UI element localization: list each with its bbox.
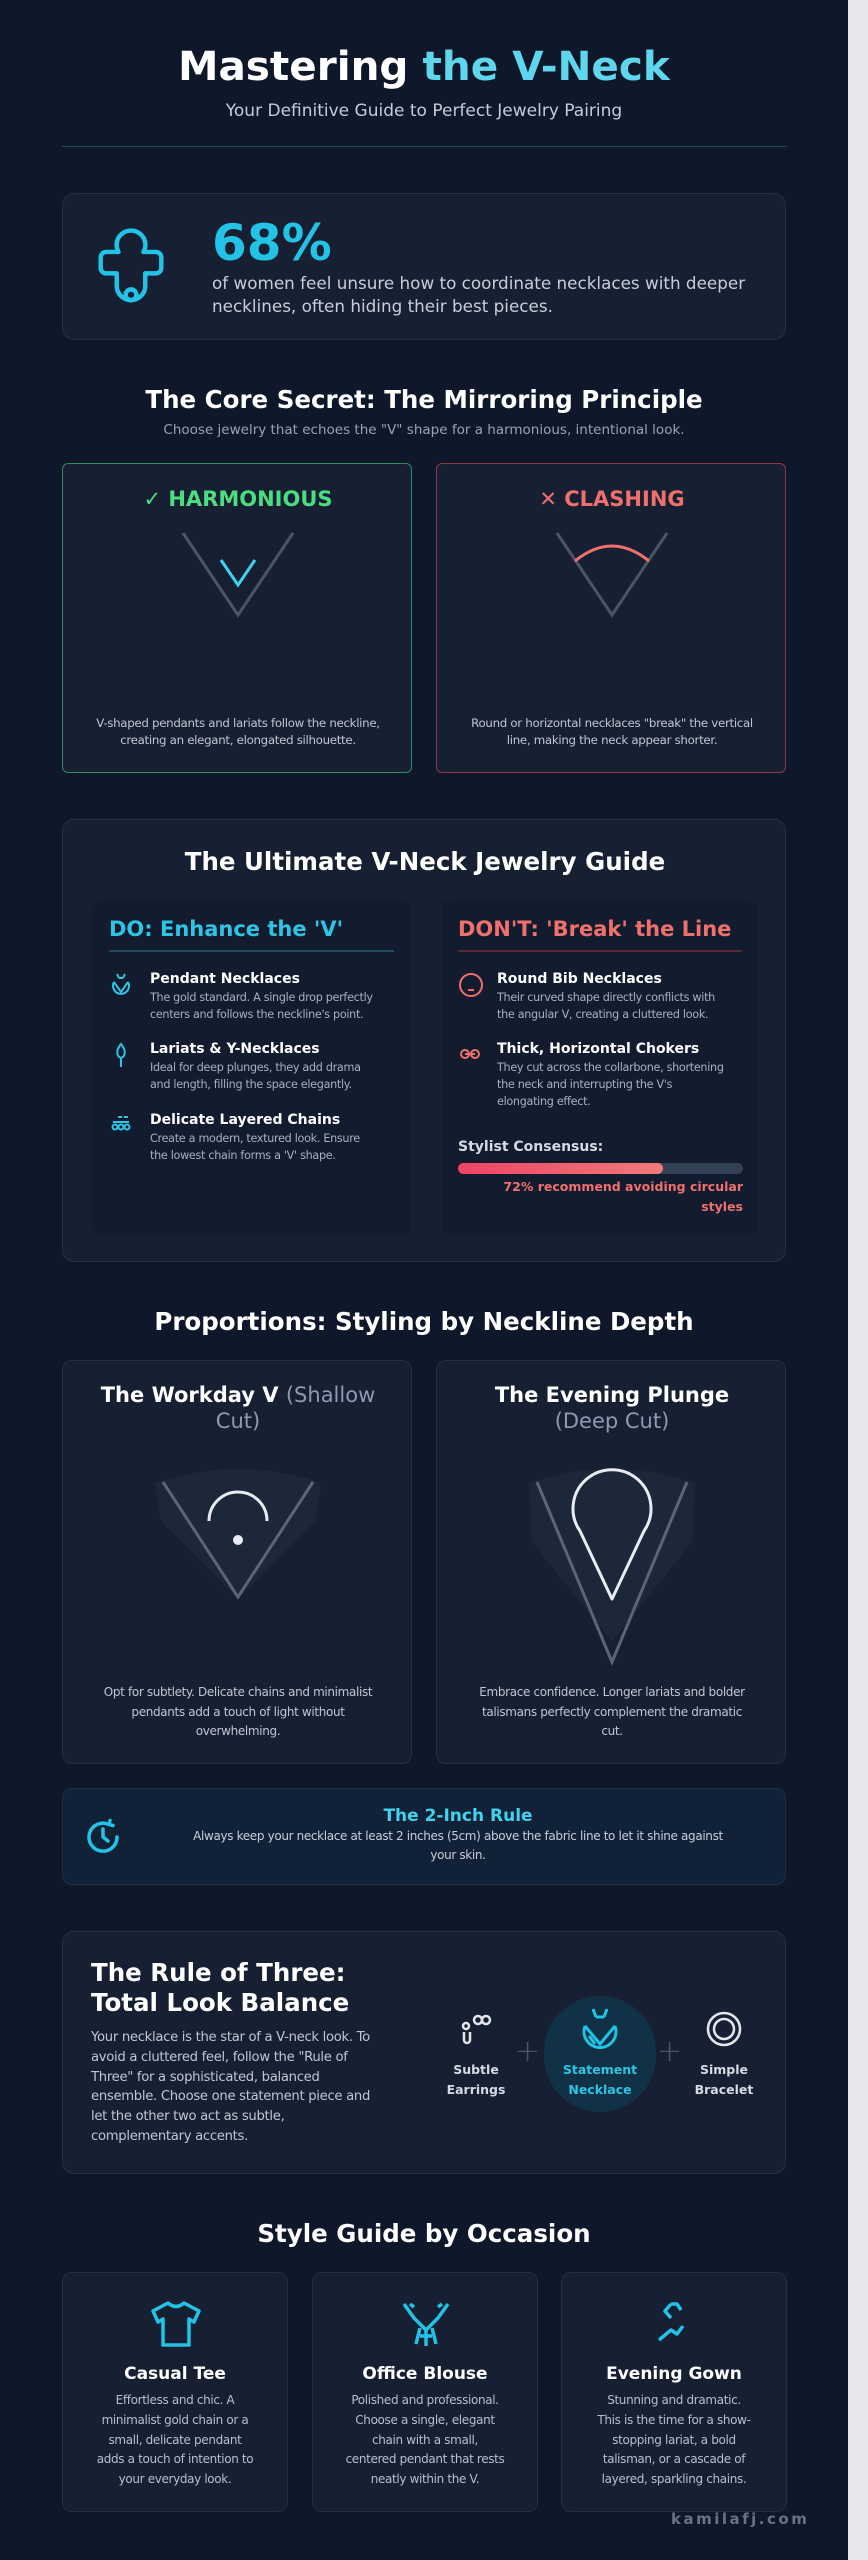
item: lariats: and length, filling the space elegantly. — [150, 1078, 352, 1091]
subheading: Choose jewelry that echoes the "V" shape for a harmonious, intentional look. — [163, 422, 685, 438]
caption: Opt for subtlety. Delicate chains and minimalist — [104, 1685, 372, 1699]
card: office blouse: centered pendant that rests — [346, 2452, 504, 2466]
icon: person — [98, 228, 164, 302]
heading: ✕ CLASHING — [539, 487, 685, 511]
rule text: Always keep your necklace at least 2 inches (5cm) above the fabric line to let it shine against — [193, 1829, 723, 1843]
panel: stat — [62, 193, 786, 340]
caption: Embrace confidence. Longer lariats and bolder — [479, 1685, 745, 1699]
rule text: The 2-Inch Rule — [383, 1806, 533, 1826]
item: lariats: Lariats & Y-Necklaces — [150, 1041, 320, 1057]
caption — [479, 1685, 746, 1738]
card: evening gown: layered, sparkling chains. — [602, 2472, 746, 2486]
card: casual tee: adds a touch of intention to — [97, 2452, 253, 2466]
body text: Your necklace is the star of a V-neck look. To — [91, 2030, 370, 2045]
card: office blouse: Polished and professional. — [351, 2393, 499, 2407]
heading: ✓ HARMONIOUS — [143, 487, 333, 511]
item: pendant: Pendant Necklaces — [150, 971, 300, 987]
stylist consensus: 72% recommend avoiding circular — [503, 1179, 743, 1194]
item: pendant — [112, 971, 373, 1021]
title: The Rule of Three: — [91, 1958, 345, 1987]
heading: occasion: Style Guide by Occasion — [257, 2219, 591, 2248]
stylist consensus — [458, 1139, 743, 1214]
item: layered: the lowest chain forms a 'V' shape. — [150, 1149, 336, 1162]
item: round bib — [459, 971, 715, 1021]
card: office blouse: Choose a single, elegant — [355, 2413, 495, 2427]
callout: 2-inch rule — [62, 1788, 786, 1885]
bar chart — [458, 1163, 743, 1174]
stat text: necklines, often hiding their best pieces. — [212, 296, 553, 316]
panel: clashing — [436, 463, 786, 773]
item: lariats: Ideal for deep plunges, they add drama — [150, 1061, 361, 1074]
item: statement necklace: Statement — [563, 2062, 637, 2077]
caption: creating an elegant, elongated silhouette. — [120, 733, 356, 747]
illustration: deep V — [536, 1468, 688, 1666]
body text: complementary accents. — [91, 2129, 248, 2144]
title: Total Look Balance — [91, 1988, 349, 2017]
item: chokers: They cut across the collarbone, shortening — [497, 1061, 724, 1074]
illustration: shallow V — [162, 1481, 314, 1600]
title: (Deep Cut) — [555, 1409, 669, 1433]
item: earrings — [447, 2014, 505, 2097]
item: pendant: centers and follows the neckline's point. — [150, 1008, 363, 1021]
card: evening gown: stopping lariat, a bold — [612, 2433, 736, 2447]
card: casual tee: minimalist gold chain or a — [102, 2413, 248, 2427]
caption: line, making the neck appear shorter. — [507, 733, 717, 747]
item: layered — [112, 1112, 360, 1162]
item: statement necklace: Necklace — [568, 2082, 632, 2097]
body text: ensemble. Choose one statement piece and — [91, 2089, 370, 2104]
card: casual tee: Effortless and chic. A — [116, 2393, 234, 2407]
panel: do — [92, 900, 411, 1235]
item: pendant: The gold standard. A single drop perfectly — [150, 991, 373, 1004]
card: office blouse: chain with a small, — [372, 2433, 478, 2447]
card: casual tee — [62, 2272, 288, 2512]
item: bracelet: Bracelet — [695, 2082, 753, 2097]
watermark: kamilafj.com — [671, 2510, 809, 2528]
title — [494, 1383, 729, 1433]
icon: blouse — [402, 2302, 450, 2346]
item: bracelet — [695, 2012, 754, 2097]
item: layered: Delicate Layered Chains — [150, 1112, 340, 1128]
card: evening gown: This is the time for a show- — [597, 2413, 751, 2427]
icon: gown — [658, 2302, 684, 2342]
item: layered: Create a modern, textured look. Ensure — [150, 1132, 360, 1145]
item: earrings: Subtle — [453, 2062, 499, 2077]
panel: evening — [436, 1360, 786, 1764]
card: office blouse: Office Blouse — [362, 2364, 488, 2384]
card: evening gown: talisman, or a cascade of — [603, 2452, 745, 2466]
stat number: 68% — [212, 214, 332, 272]
item: round bib: the angular V, creating a cluttered look. — [497, 1008, 708, 1021]
subtitle: Your Definitive Guide to Perfect Jewelry Pairing — [226, 101, 622, 121]
item: chokers — [460, 1041, 724, 1108]
caption: cut. — [601, 1724, 623, 1738]
caption: talismans perfectly complement the dramatic — [482, 1704, 742, 1718]
plus: + — [515, 2034, 540, 2069]
title: The Evening Plunge — [495, 1383, 729, 1407]
card: evening gown: Evening Gown — [606, 2364, 742, 2384]
body text: let the other two act as subtle, — [91, 2109, 284, 2124]
item: statement necklace — [544, 1996, 656, 2112]
item: chokers: the neck and interrupting the V's — [497, 1078, 672, 1091]
item: bracelet: Simple — [700, 2062, 748, 2077]
item: chokers: Thick, Horizontal Chokers — [497, 1041, 699, 1057]
title: Cut) — [216, 1409, 260, 1433]
heading: core secret: The Core Secret: The Mirroring Principle — [145, 385, 703, 414]
body text: avoid a cluttered feel, follow the "Rule of — [91, 2050, 348, 2065]
card: evening gown — [561, 2272, 787, 2512]
panel: harmonious — [62, 463, 412, 773]
icon: clock — [87, 1818, 119, 1853]
rule text — [193, 1806, 723, 1862]
panel: ultimate guide — [62, 819, 786, 1262]
icon: round necklace — [556, 532, 668, 618]
item: lariats — [116, 1041, 361, 1091]
title: The Workday V (Shallow — [101, 1383, 375, 1407]
icon: tee — [151, 2301, 201, 2347]
caption: V-shaped pendants and lariats follow the neckline, — [96, 716, 380, 730]
do heading: DO: Enhance the 'V' — [109, 917, 343, 941]
card: casual tee: small, delicate pendant — [109, 2433, 241, 2447]
card: casual tee: Casual Tee — [124, 2364, 226, 2384]
panel: rule of three — [62, 1931, 786, 2174]
card: evening gown: Stunning and dramatic. — [607, 2393, 741, 2407]
stylist consensus: styles — [701, 1199, 743, 1214]
item: round bib: Their curved shape directly conflicts with — [497, 991, 715, 1004]
heading: The Ultimate V-Neck Jewelry Guide — [185, 847, 665, 876]
item: round bib: Round Bib Necklaces — [497, 971, 662, 987]
rule text: your skin. — [430, 1848, 486, 1862]
caption: overwhelming. — [196, 1724, 280, 1738]
stat text — [212, 273, 746, 316]
dont heading: DON'T: 'Break' the Line — [458, 917, 731, 941]
caption: Round or horizontal necklaces "break" the vertical — [471, 716, 753, 730]
caption: pendants add a touch of light without — [131, 1704, 345, 1718]
body text: Three" for a sophisticated, balanced — [91, 2070, 320, 2085]
title — [91, 1958, 349, 2017]
card: office blouse: neatly within the V. — [371, 2472, 479, 2486]
icon: V neckline — [182, 532, 294, 618]
stylist consensus: Stylist Consensus: — [458, 1139, 603, 1155]
stat text: of women feel unsure how to coordinate necklaces with deeper — [212, 273, 745, 293]
caption — [471, 716, 753, 747]
body text — [90, 2030, 370, 2144]
panel: dont — [441, 900, 758, 1235]
heading: proportions: Proportions: Styling by Neckline Depth — [154, 1307, 694, 1336]
card: office blouse — [312, 2272, 538, 2512]
caption — [96, 716, 380, 747]
item: earrings: Earrings — [447, 2082, 505, 2097]
title — [100, 1383, 375, 1433]
plus: + — [657, 2034, 682, 2069]
card: casual tee: your everyday look. — [119, 2472, 231, 2486]
panel: workday — [62, 1360, 412, 1764]
item: chokers: elongating effect. — [497, 1095, 590, 1108]
caption — [104, 1685, 372, 1738]
title: Mastering the V-Neck — [178, 42, 670, 90]
